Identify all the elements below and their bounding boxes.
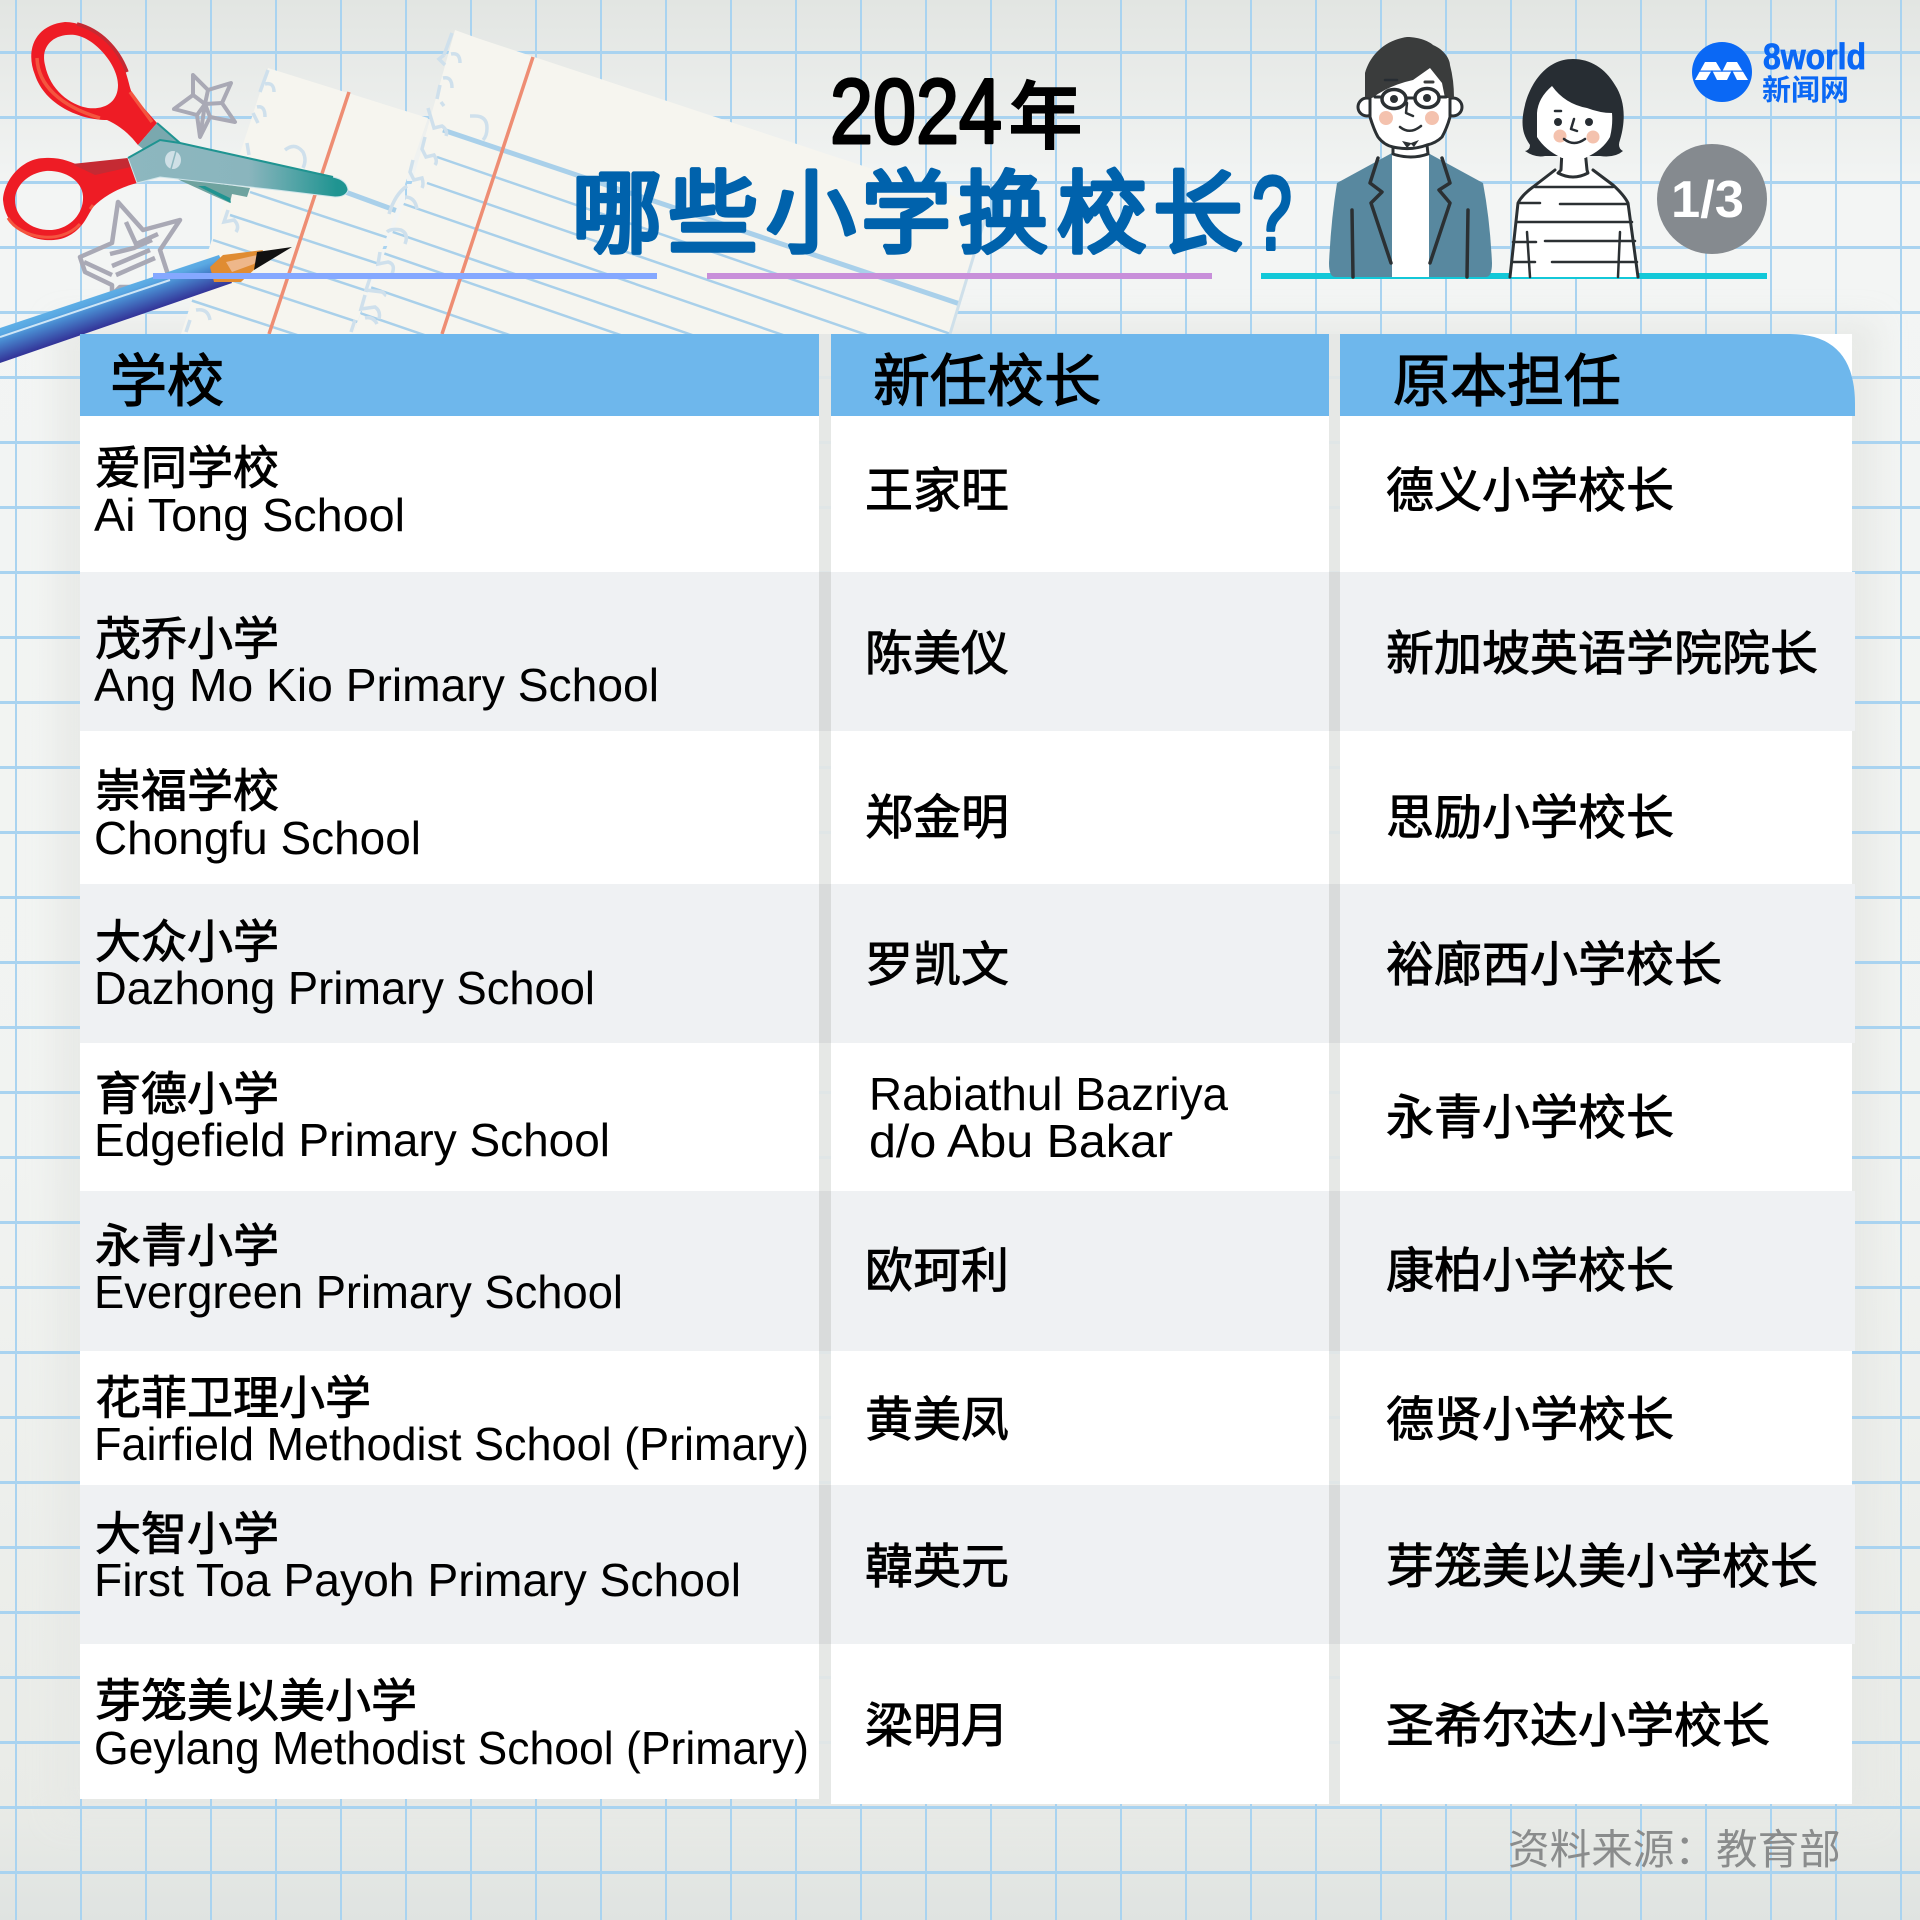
row: Ang Mo Kio: 陈美仪 xyxy=(865,628,1009,681)
icon: star small xyxy=(174,75,235,137)
row: Ang Mo Kio xyxy=(94,613,1818,711)
illustration: woman in striped top xyxy=(1510,59,1638,277)
illustration: man in blue jacket xyxy=(1329,37,1492,277)
row: Evergreen: 欧珂利 xyxy=(865,1245,1009,1298)
row: Edgefield: Rabiathul Bazriya xyxy=(869,1068,1228,1120)
row: Fairfield: 德贤小学校长 xyxy=(1386,1394,1674,1447)
title: question: 校 xyxy=(1057,165,1147,265)
row: First Toa Payoh: 韓英元 xyxy=(865,1541,1009,1594)
row: Geylang: 梁明月 xyxy=(865,1700,1009,1753)
row: First Toa Payoh xyxy=(94,1508,1818,1606)
row: Ai Tong: Ai Tong School xyxy=(94,489,405,541)
row: Edgefield: d/o Abu Bakar xyxy=(869,1115,1173,1167)
table header: 学校 xyxy=(110,350,224,414)
row: First Toa Payoh: First Toa Payoh Primary School xyxy=(94,1554,741,1606)
row: Evergreen: Evergreen Primary School xyxy=(94,1266,623,1318)
title: year: 年 xyxy=(1008,75,1083,159)
row: Chongfu xyxy=(94,765,1674,864)
row: Dazhong xyxy=(94,916,1722,1014)
row: First Toa Payoh: 芽笼美以美小学校长 xyxy=(1386,1541,1818,1594)
logo: 8world: 8world xyxy=(1763,36,1866,77)
row: Chongfu: 思励小学校长 xyxy=(1386,792,1674,845)
row: Ang Mo Kio: 茂乔小学 xyxy=(95,613,279,665)
title: question: 换 xyxy=(958,165,1048,265)
row: Edgefield: 育德小学 xyxy=(95,1068,279,1120)
table rows background xyxy=(80,416,1855,1804)
title: question: 小 xyxy=(766,165,856,265)
badge: page number: 1/3 xyxy=(1671,171,1744,229)
row: Ang Mo Kio: Ang Mo Kio Primary School xyxy=(94,659,659,711)
row: Fairfield: 黄美凤 xyxy=(865,1394,1009,1447)
accent underlines xyxy=(153,273,1767,279)
title: year: 2024 xyxy=(830,61,1002,163)
row: Ai Tong xyxy=(94,442,1674,541)
title: question xyxy=(572,156,1292,272)
row: Edgefield: 永青小学校长 xyxy=(1386,1092,1674,1145)
row: Fairfield xyxy=(94,1372,1674,1470)
row: Evergreen xyxy=(94,1220,1674,1318)
title: question: 哪 xyxy=(572,165,662,265)
row: Ang Mo Kio: 新加坡英语学院院长 xyxy=(1386,628,1818,681)
row: Dazhong: Dazhong Primary School xyxy=(94,962,595,1014)
table header: 新任校长 xyxy=(873,350,1101,414)
title: question: 些 xyxy=(668,165,758,265)
badge: page number xyxy=(1657,144,1767,254)
row: First Toa Payoh: 大智小学 xyxy=(95,1508,279,1560)
row: Geylang: 芽笼美以美小学 xyxy=(95,1675,417,1727)
row: Dazhong: 裕廊西小学校长 xyxy=(1386,939,1722,992)
logo: 8world: 新闻网 xyxy=(1762,74,1849,107)
icon: star large xyxy=(80,202,180,295)
title: question: 长 xyxy=(1153,165,1243,265)
table header xyxy=(80,334,1855,416)
row: Dazhong: 罗凯文 xyxy=(865,939,1009,992)
row: Chongfu: Chongfu School xyxy=(94,812,421,864)
source note: 资料来源：教育部 xyxy=(1508,1826,1841,1873)
row: Edgefield: Edgefield Primary School xyxy=(94,1114,610,1166)
row: Evergreen: 永青小学 xyxy=(95,1220,279,1272)
logo: 8world xyxy=(1692,36,1866,107)
row: Ai Tong: 王家旺 xyxy=(865,465,1009,518)
row: Ai Tong: 德义小学校长 xyxy=(1386,465,1674,518)
icon: scissors xyxy=(3,22,348,240)
row: Chongfu: 郑金明 xyxy=(865,792,1009,845)
table header: 原本担任 xyxy=(1393,350,1621,414)
row: Dazhong: 大众小学 xyxy=(95,916,279,968)
title: question: 学 xyxy=(861,165,951,265)
row: Evergreen: 康柏小学校长 xyxy=(1386,1245,1674,1298)
row: Geylang: Geylang Methodist School (Primary) xyxy=(94,1722,809,1774)
row: Chongfu: 崇福学校 xyxy=(95,765,279,817)
illustration: notebook paper sheets xyxy=(181,30,986,334)
row: Edgefield xyxy=(94,1068,1674,1167)
row: Ai Tong: 爱同学校 xyxy=(95,442,279,494)
row: Fairfield: 花菲卫理小学 xyxy=(95,1372,371,1424)
table gutters xyxy=(819,334,1340,1804)
title: question: ? xyxy=(1252,156,1292,272)
row: Geylang xyxy=(94,1675,1770,1774)
icon: pencil xyxy=(0,247,292,363)
row: Fairfield: Fairfield Methodist School (Primary) xyxy=(94,1418,809,1470)
row: Geylang: 圣希尔达小学校长 xyxy=(1386,1700,1770,1753)
